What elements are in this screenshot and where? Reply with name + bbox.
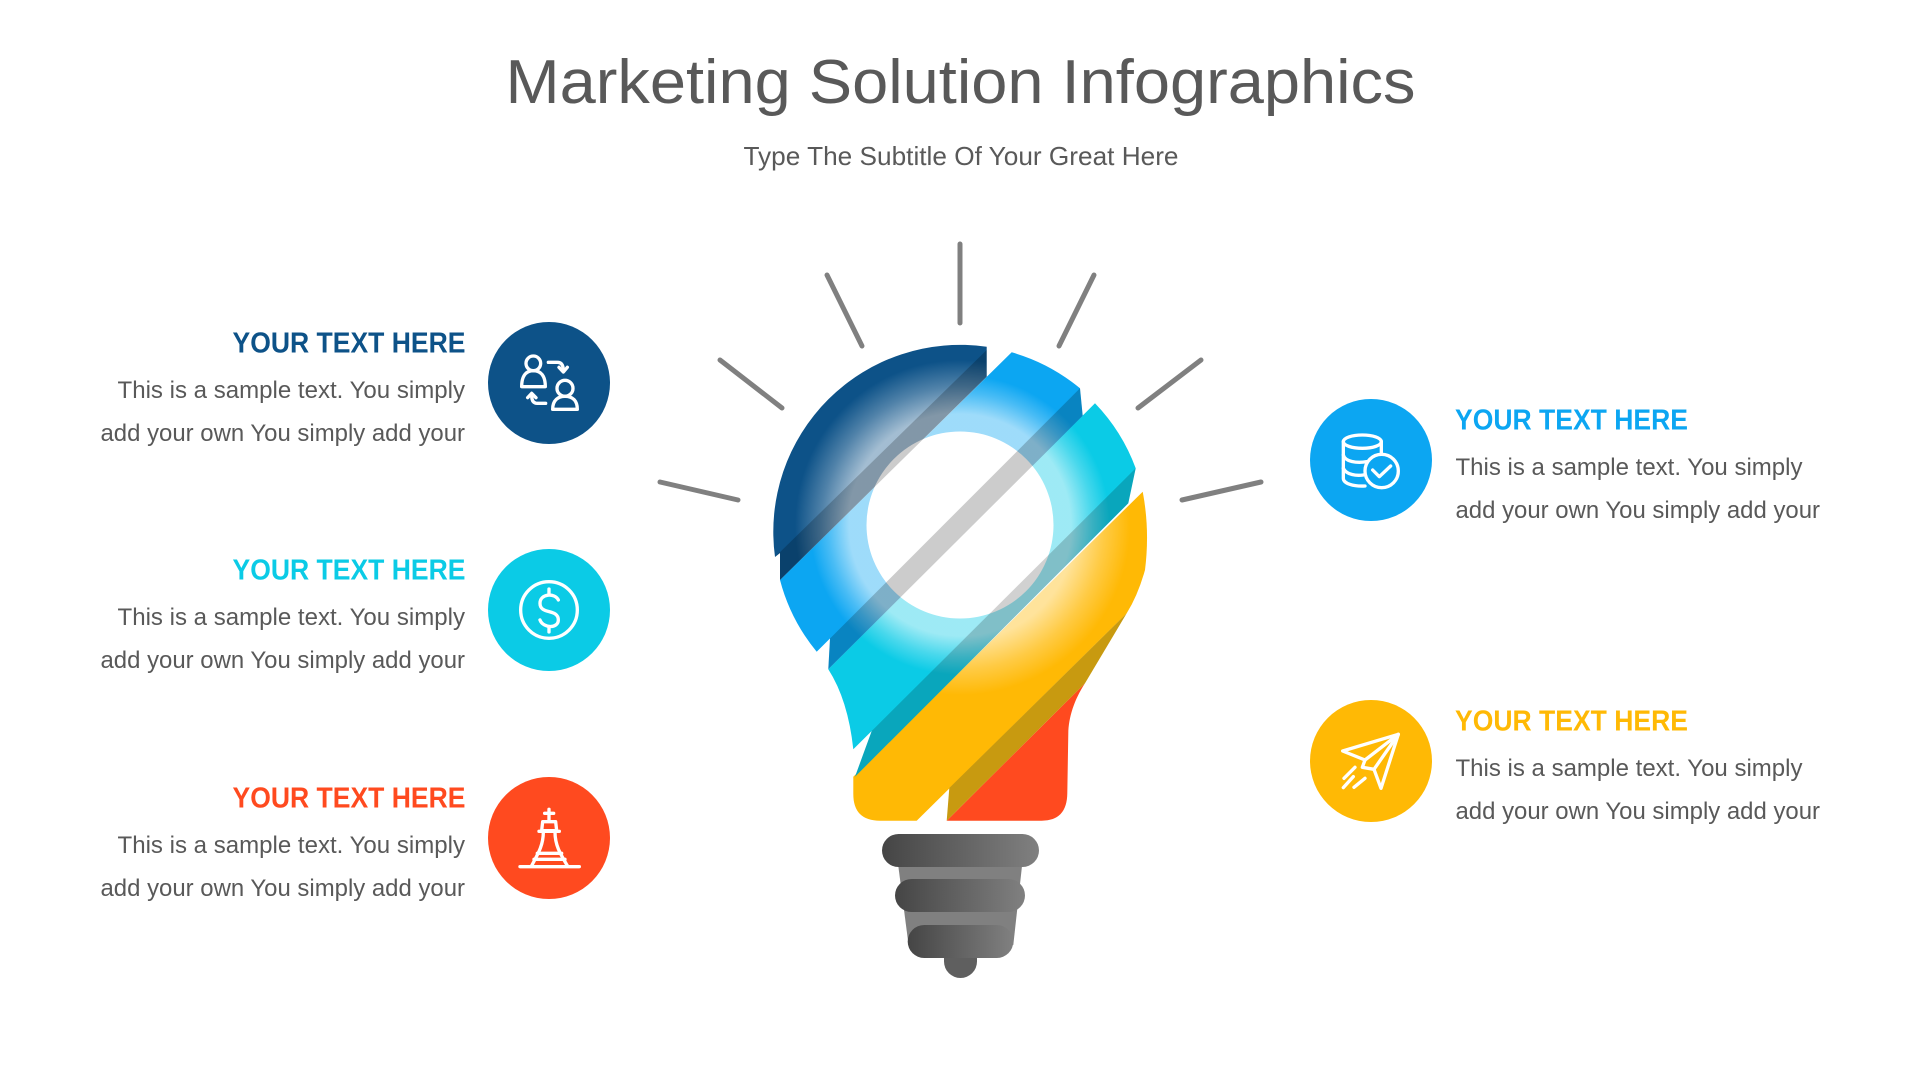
heading: YOUR TEXT HERE	[1455, 404, 1688, 436]
body text	[100, 604, 466, 674]
base thread top	[882, 834, 1039, 867]
body text: add your own You simply add your	[100, 647, 465, 674]
bulb stripe: blue with its band base	[780, 352, 1083, 669]
title: Marketing Solution Infographics	[506, 48, 1416, 117]
panel: left item 2	[100, 549, 610, 674]
subtitle: Type The Subtitle Of Your Great Here	[744, 141, 1178, 171]
heading: YOUR TEXT HERE	[1455, 706, 1688, 738]
icon: chess king	[520, 809, 579, 867]
base thread bottom	[908, 925, 1013, 958]
heading: YOUR TEXT HERE	[232, 328, 466, 360]
panel: left item 1	[100, 322, 610, 447]
bulb shadow band: cyan	[855, 468, 1136, 777]
panel: left item 3	[100, 777, 610, 902]
icon: database check	[1343, 435, 1398, 488]
bulb stripe: amber	[853, 492, 1147, 821]
body text	[100, 832, 466, 902]
bulb base	[882, 834, 1039, 978]
body text: This is a sample text. You simply	[118, 604, 466, 631]
body text: This is a sample text. You simply	[118, 377, 466, 404]
panel: right item 2	[1310, 700, 1820, 825]
body text: This is a sample text. You simply	[1456, 454, 1803, 481]
bulb shadow band: amber	[947, 613, 1127, 821]
bulb stripe: cyan with its band base	[828, 403, 1136, 777]
heading: YOUR TEXT HERE	[232, 782, 466, 814]
bulb stripe: orange	[947, 683, 1085, 821]
icon: light rays	[660, 244, 1261, 500]
base tip nub	[944, 940, 977, 978]
body text: add your own You simply add your	[1456, 798, 1820, 825]
panel: right item 1	[1310, 399, 1820, 524]
body text: This is a sample text. You simply	[1456, 755, 1803, 782]
body text: add your own You simply add your	[1456, 497, 1820, 524]
icon circle	[488, 777, 610, 899]
body text: add your own You simply add your	[100, 420, 465, 447]
heading: YOUR TEXT HERE	[232, 554, 466, 586]
icon circle	[1310, 399, 1432, 521]
body text	[1456, 755, 1820, 825]
icon: people exchange	[522, 356, 577, 409]
base body	[898, 866, 1022, 945]
light bulb	[773, 345, 1147, 821]
bulb centre hole	[866, 432, 1054, 618]
bulb shadow band: navy	[775, 350, 987, 580]
icon circle	[1310, 700, 1432, 822]
icon circle	[488, 322, 610, 444]
base thread middle	[895, 879, 1025, 912]
body text	[100, 377, 466, 447]
body text	[1456, 454, 1820, 524]
bulb stripe: navy with its band base	[773, 345, 987, 580]
icon: paper plane	[1343, 734, 1398, 788]
body text: add your own You simply add your	[100, 875, 465, 902]
body text: This is a sample text. You simply	[118, 832, 466, 859]
bulb shadow band: blue	[828, 388, 1083, 669]
icon circle	[488, 549, 610, 671]
icon: dollar coin	[521, 582, 577, 638]
